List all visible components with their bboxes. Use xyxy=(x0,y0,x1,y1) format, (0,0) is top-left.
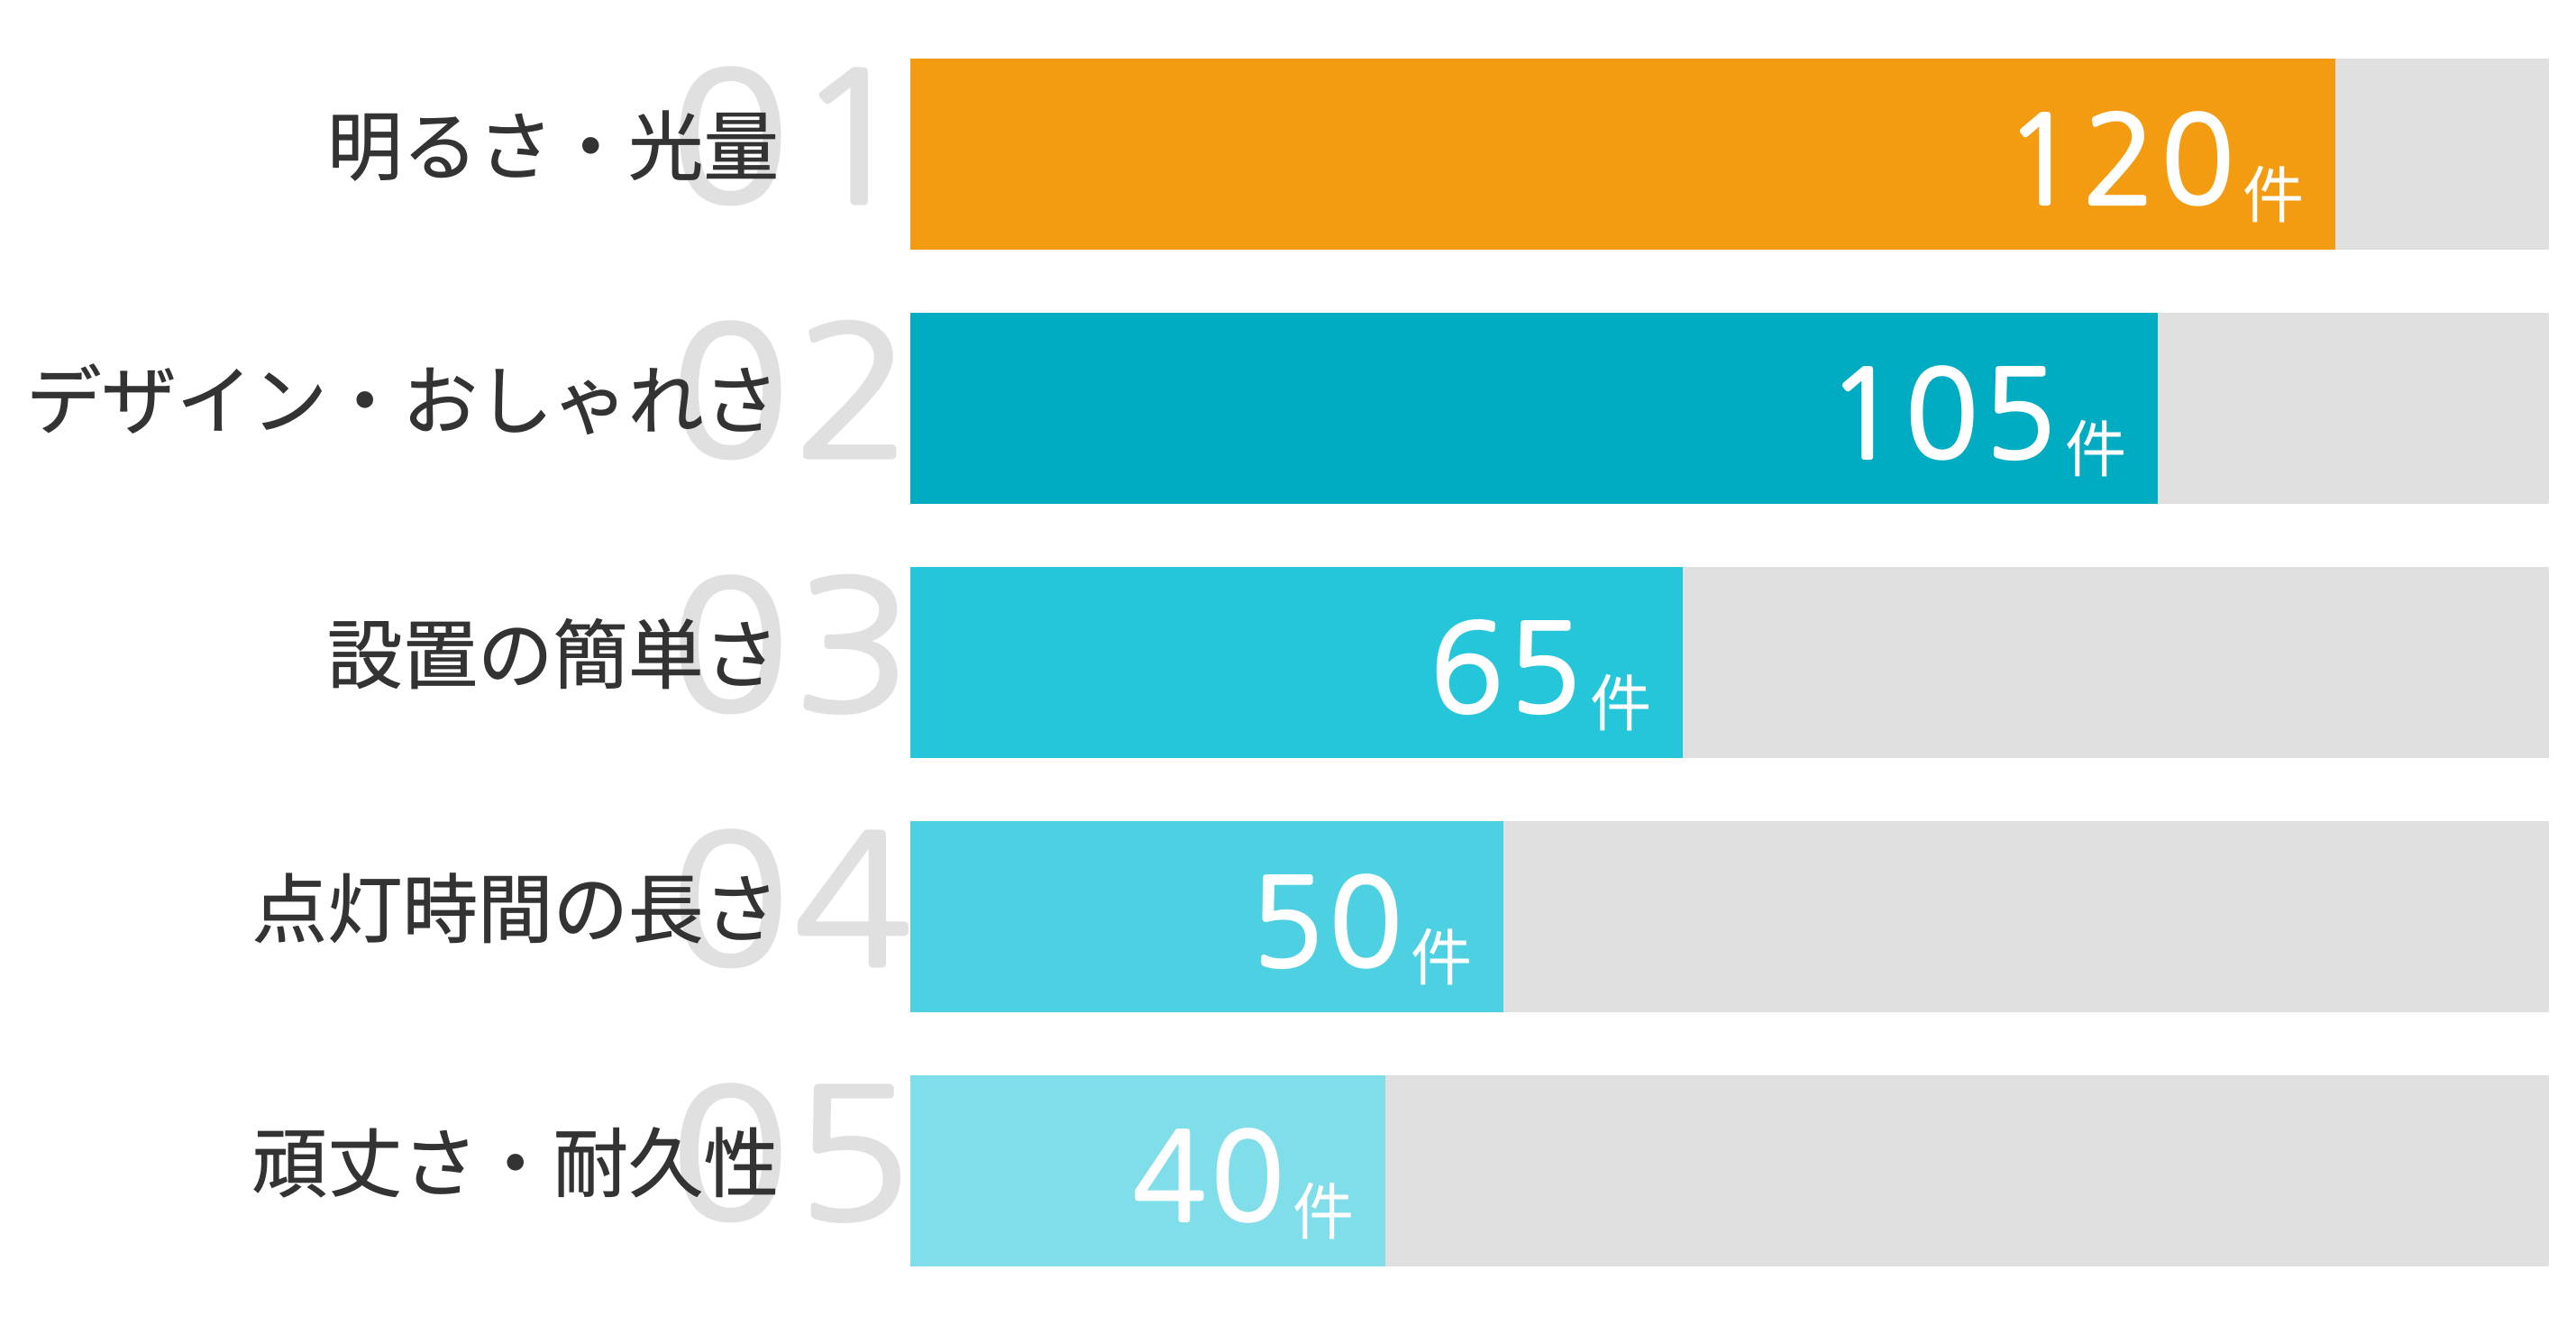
row 4: lighting duration xyxy=(252,812,2549,1012)
bar track 5 xyxy=(910,1075,2549,1266)
unit: 件 xyxy=(1590,671,1651,739)
bar value 1 xyxy=(910,59,2335,250)
value 120: 120 xyxy=(2005,100,2239,222)
row 2: design xyxy=(26,304,2549,504)
unit: 件 xyxy=(1411,925,1472,993)
unit: 件 xyxy=(1293,1179,1354,1247)
row 5: durability xyxy=(252,1066,2549,1266)
row 1: brightness xyxy=(327,50,2549,250)
value 105: 105 xyxy=(1827,354,2061,476)
unit: 件 xyxy=(2065,416,2126,485)
bar track 4 xyxy=(910,821,2549,1012)
label: brightness: 明るさ・光量 xyxy=(327,105,779,190)
bar value 4 xyxy=(910,821,1503,1012)
rank number 05: 05 xyxy=(670,1066,916,1246)
rank number 02: 02 xyxy=(670,304,916,483)
label: lighting duration: 点灯時間の長さ xyxy=(252,868,779,953)
bar value 2 xyxy=(910,313,2158,504)
bar value 3 xyxy=(910,567,1683,758)
bar track 1 xyxy=(910,59,2549,250)
label: design: デザイン・おしゃれさ xyxy=(26,360,779,444)
row 3: ease of installation xyxy=(327,558,2549,758)
bar track 3 xyxy=(910,567,2549,758)
value 40: 40 xyxy=(1132,1117,1289,1238)
rank number 03: 03 xyxy=(670,558,916,737)
label: ease of installation: 設置の簡単さ xyxy=(327,614,779,699)
unit: 件 xyxy=(2243,162,2304,231)
bar track 2 xyxy=(910,313,2549,504)
rank number 04: 04 xyxy=(670,812,916,991)
value 65: 65 xyxy=(1430,608,1586,730)
value 50: 50 xyxy=(1250,863,1407,984)
rank number 01: 01 xyxy=(670,50,916,229)
bar value 5 xyxy=(910,1075,1385,1266)
label: durability: 頑丈さ・耐久性 xyxy=(252,1122,779,1207)
